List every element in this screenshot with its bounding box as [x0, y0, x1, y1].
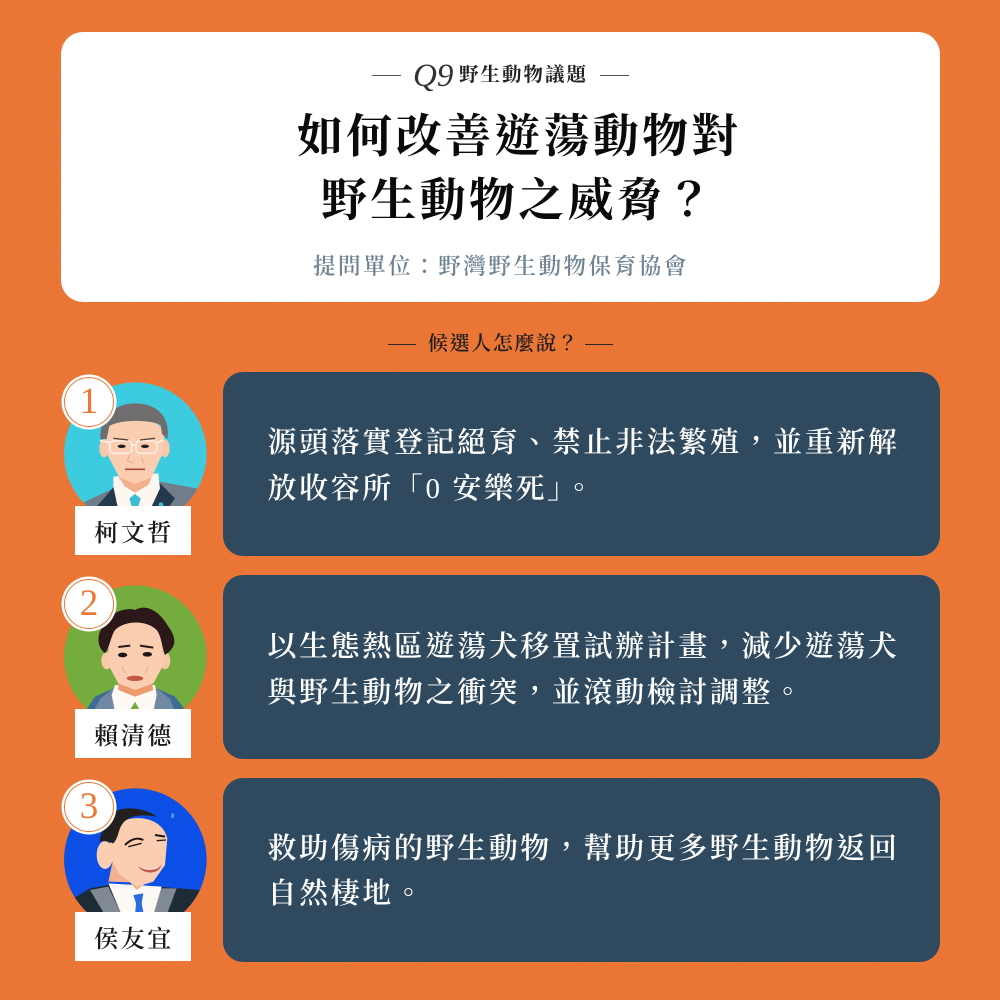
proposing organisation: 提問單位：野灣野生動物保育協會	[313, 254, 689, 279]
answer text: 自然棲地。	[268, 878, 426, 910]
answer text: 與野生動物之衝突，並滾動檢討調整。	[268, 677, 805, 709]
number badge: 2	[80, 583, 98, 624]
portrait: 侯友宜	[64, 788, 207, 912]
name label	[75, 709, 191, 758]
title: 野生動物之威脅？	[321, 175, 715, 226]
portrait: 柯文哲	[64, 382, 207, 506]
answer text	[268, 427, 900, 505]
number badge	[64, 377, 114, 427]
card: candidate 2 answer	[223, 575, 940, 759]
candidate 3	[62, 778, 940, 962]
answer text: 源頭落實登記絕育、禁止非法繁殖，並重新解	[268, 427, 900, 459]
title	[297, 111, 741, 226]
name label: 侯友宜	[94, 927, 174, 953]
number badge	[64, 782, 114, 832]
answer text	[268, 631, 900, 709]
number badge	[64, 579, 114, 629]
name label: 柯文哲	[94, 521, 174, 547]
section heading: 候選人怎麼說？	[428, 333, 579, 355]
answer text	[268, 833, 900, 910]
eyebrow: Q9 topic	[372, 58, 629, 94]
eyebrow: Q9 topic: 野生動物議題	[459, 65, 588, 86]
candidate 1	[62, 372, 940, 556]
answer text: 放收容所「0 安樂死」。	[268, 473, 596, 505]
name label: 賴清德	[94, 724, 174, 750]
portrait: 賴清德	[64, 585, 207, 709]
number badge: 3	[80, 786, 98, 827]
panel: question header	[61, 32, 940, 302]
eyebrow: Q9 topic: Q9	[413, 58, 453, 94]
title: 如何改善遊蕩動物對	[297, 111, 741, 162]
name label	[75, 912, 191, 961]
number badge: 1	[80, 381, 98, 422]
candidate 2	[62, 575, 940, 759]
answer text: 救助傷病的野生動物，幫助更多野生動物返回	[268, 833, 900, 865]
card: candidate 3 answer	[223, 778, 940, 962]
answer text: 以生態熱區遊蕩犬移置試辦計畫，減少遊蕩犬	[268, 631, 900, 663]
card: candidate 1 answer	[223, 372, 940, 556]
name label	[75, 506, 191, 555]
